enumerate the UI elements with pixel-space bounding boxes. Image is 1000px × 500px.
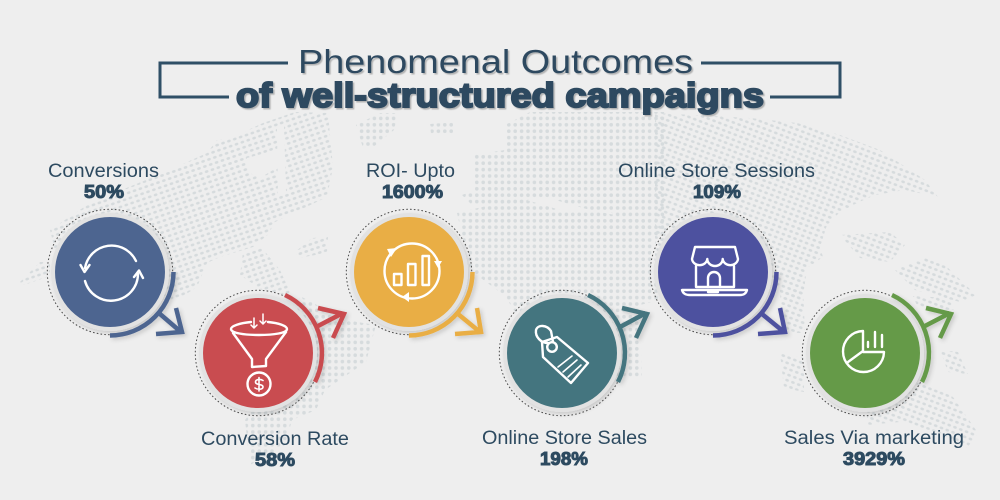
icon: funnel with coin	[231, 314, 287, 396]
value: 1600%: 1600%	[382, 182, 443, 202]
halo ring	[350, 213, 468, 331]
dotted ring	[346, 209, 472, 335]
title line 2: of well-structured campaigns	[236, 77, 764, 115]
value: 198%: 198%	[540, 449, 588, 469]
title	[160, 43, 840, 115]
icon: price tag	[536, 326, 588, 383]
green disc	[810, 298, 920, 408]
dotted world map	[20, 112, 978, 465]
value: 58%: 58%	[255, 450, 295, 470]
halo ring	[199, 294, 317, 412]
progress arc and arrow	[110, 272, 182, 336]
icon: storefront on laptop	[682, 247, 747, 295]
dotted ring	[802, 290, 928, 416]
blue disc	[55, 217, 165, 327]
progress arc and arrow	[409, 272, 481, 336]
panel: conversion rate	[195, 290, 349, 470]
purple disc	[658, 217, 768, 327]
label: sales via marketing: Sales Via marketing	[784, 428, 964, 449]
label: conversions: Conversions	[48, 161, 159, 182]
panel: sales via marketing	[784, 290, 964, 469]
dotted ring	[47, 209, 173, 335]
red disc	[203, 298, 313, 408]
value: 3929%: 3929%	[843, 449, 905, 469]
title line 1: Phenomenal Outcomes	[298, 43, 693, 80]
value: 50%: 50%	[84, 182, 124, 202]
halo ring	[503, 294, 621, 412]
panel: ROI	[346, 161, 481, 336]
title bracket	[160, 63, 840, 97]
yellow disc	[354, 217, 464, 327]
teal disc	[507, 298, 617, 408]
progress arc and arrow	[588, 295, 647, 382]
value: 109%: 109%	[693, 182, 741, 202]
panel: online store sales	[482, 290, 647, 469]
halo ring	[51, 213, 169, 331]
icon: bar chart in cycle	[384, 244, 442, 302]
dotted ring	[499, 290, 625, 416]
label: online store sales: Online Store Sales	[482, 428, 647, 449]
halo ring	[806, 294, 924, 412]
dotted ring	[195, 290, 321, 416]
label: ROI upto: ROI- Upto	[366, 161, 455, 182]
panel: conversions	[47, 161, 182, 336]
label: online store sessions: Online Store Sessions	[618, 161, 815, 182]
progress arc and arrow	[285, 295, 344, 382]
label: conversion rate: Conversion Rate	[201, 429, 349, 450]
icon: refresh arrows	[80, 246, 143, 301]
panel: online store sessions	[618, 161, 815, 336]
progress arc and arrow	[892, 295, 951, 382]
dotted ring	[650, 209, 776, 335]
icon: pie chart and bars	[843, 331, 884, 372]
halo ring	[654, 213, 772, 331]
progress arc and arrow	[713, 272, 785, 336]
